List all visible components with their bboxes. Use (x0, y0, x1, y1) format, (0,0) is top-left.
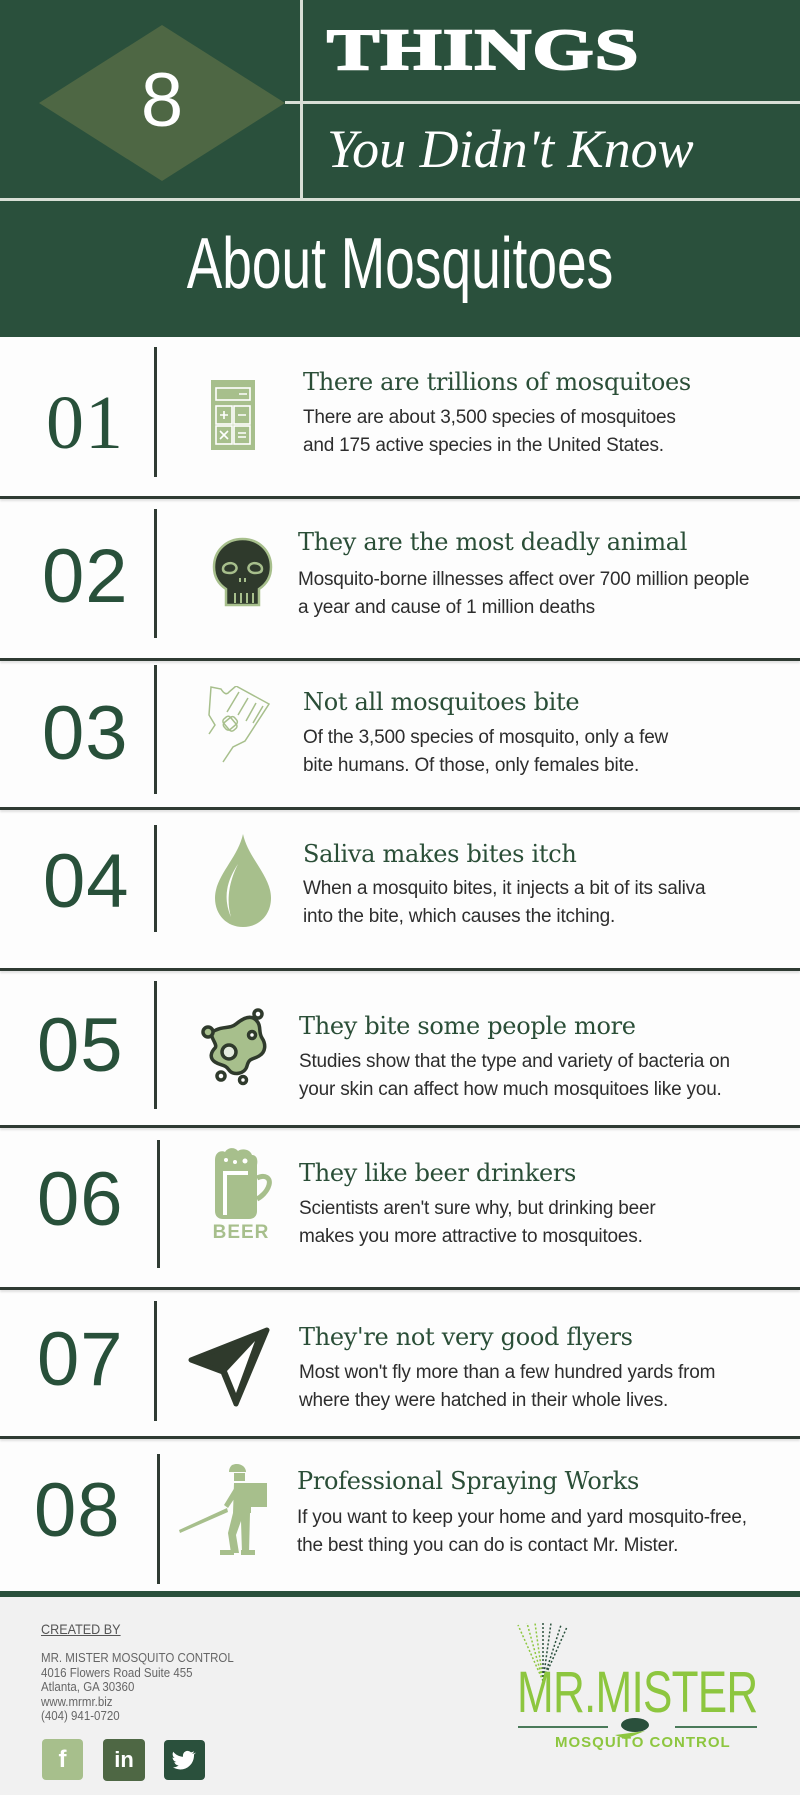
row 05 (37, 981, 730, 1109)
diamond badge (39, 25, 285, 181)
body 03: Of the 3,500 species of mosquito, only a few (303, 727, 668, 748)
icon: skull (212, 538, 272, 606)
body 04: When a mosquito bites, it injects a bit of its saliva (303, 878, 705, 899)
logo: Mr. Mister (517, 1623, 757, 1751)
address (41, 1651, 234, 1723)
icon: drop (215, 834, 271, 927)
footer (0, 1591, 800, 1795)
logo: Mr. Mister: MR.MISTER (517, 1660, 757, 1725)
row 02 (42, 509, 749, 638)
icon: bacteria (201, 1008, 266, 1086)
row 03 (42, 665, 668, 794)
number 04: 04 (43, 839, 130, 924)
body 04 (303, 878, 706, 927)
body 01: There are about 3,500 species of mosquitoes (303, 407, 676, 428)
row 04 (43, 825, 706, 932)
number 08: 08 (34, 1468, 121, 1553)
body 07: Most won't fly more than a few hundred yards from (299, 1362, 715, 1383)
row 08 (34, 1454, 747, 1584)
icon: beer (213, 1148, 272, 1240)
address: www.mrmr.biz (41, 1694, 113, 1708)
body 06 (299, 1198, 656, 1247)
body 02: Mosquito-borne illnesses affect over 700 million people (298, 569, 749, 590)
title 05: They bite some people more (299, 1012, 636, 1040)
title 01: There are trillions of mosquitoes (303, 368, 691, 396)
title 07: They're not very good flyers (299, 1323, 633, 1351)
icon: facebook: f (58, 1746, 66, 1773)
body 05 (299, 1051, 730, 1100)
row 07 (37, 1301, 715, 1421)
logo: Mr. Mister: MOSQUITO CONTROL (555, 1734, 731, 1751)
title 03: Not all mosquitoes bite (303, 688, 579, 716)
icon: sprayer person (179, 1464, 267, 1555)
title 06: They like beer drinkers (299, 1159, 576, 1187)
icon: linkedin: in (114, 1747, 134, 1772)
body 01 (303, 407, 676, 456)
created by: CREATED BY (41, 1621, 121, 1637)
number 05: 05 (37, 1003, 124, 1088)
address: 4016 Flowers Road Suite 455 (41, 1666, 193, 1680)
number 07: 07 (37, 1317, 124, 1402)
icon: linkedin (103, 1739, 145, 1781)
icon: calculator (211, 380, 255, 450)
address: (404) 941-0720 (41, 1709, 120, 1723)
row 01 (46, 347, 691, 477)
address: MR. MISTER MOSQUITO CONTROL (41, 1651, 234, 1665)
number 06: 06 (37, 1157, 124, 1242)
subtitle: You Didn't Know: You Didn't Know (327, 119, 694, 179)
body 03: bite humans. Of those, only females bite. (303, 755, 639, 776)
body 05: Studies show that the type and variety of bacteria on (299, 1051, 730, 1072)
icon: facebook (42, 1739, 83, 1780)
title 02: They are the most deadly animal (298, 528, 687, 556)
body 08: If you want to keep your home and yard mosquito-free, (297, 1507, 747, 1528)
title 04: Saliva makes bites itch (303, 840, 577, 868)
icon: hand with bandage (208, 686, 270, 762)
body 03 (303, 727, 668, 776)
address: Atlanta, GA 30360 (41, 1680, 134, 1694)
number 01: 01 (46, 381, 124, 465)
body 01: and 175 active species in the United States. (303, 435, 664, 456)
body 08: the best thing you can do is contact Mr. Mister. (297, 1535, 678, 1556)
icon: twitter (164, 1740, 205, 1780)
body 06: Scientists aren't sure why, but drinking beer (299, 1198, 656, 1219)
body 02: a year and cause of 1 million deaths (298, 597, 595, 618)
diamond badge: 8 (141, 58, 183, 143)
title: THINGS: THINGS (327, 17, 640, 82)
row 06 (37, 1140, 656, 1268)
title: About Mosquitoes: About Mosquitoes (187, 224, 613, 304)
body 07: where they were hatched in their whole lives. (299, 1390, 668, 1411)
number 02: 02 (42, 534, 129, 619)
header (0, 0, 800, 337)
body 06: makes you more attractive to mosquitoes. (299, 1226, 643, 1247)
number 03: 03 (42, 691, 129, 776)
body 07 (299, 1362, 715, 1411)
body 08 (297, 1507, 747, 1556)
title 08: Professional Spraying Works (297, 1467, 639, 1495)
social icons (42, 1739, 205, 1781)
body 05: your skin can affect how much mosquitoes like you. (299, 1079, 722, 1100)
body 04: into the bite, which causes the itching. (303, 906, 615, 927)
body 02 (298, 569, 749, 618)
icon: arrow (188, 1328, 270, 1406)
